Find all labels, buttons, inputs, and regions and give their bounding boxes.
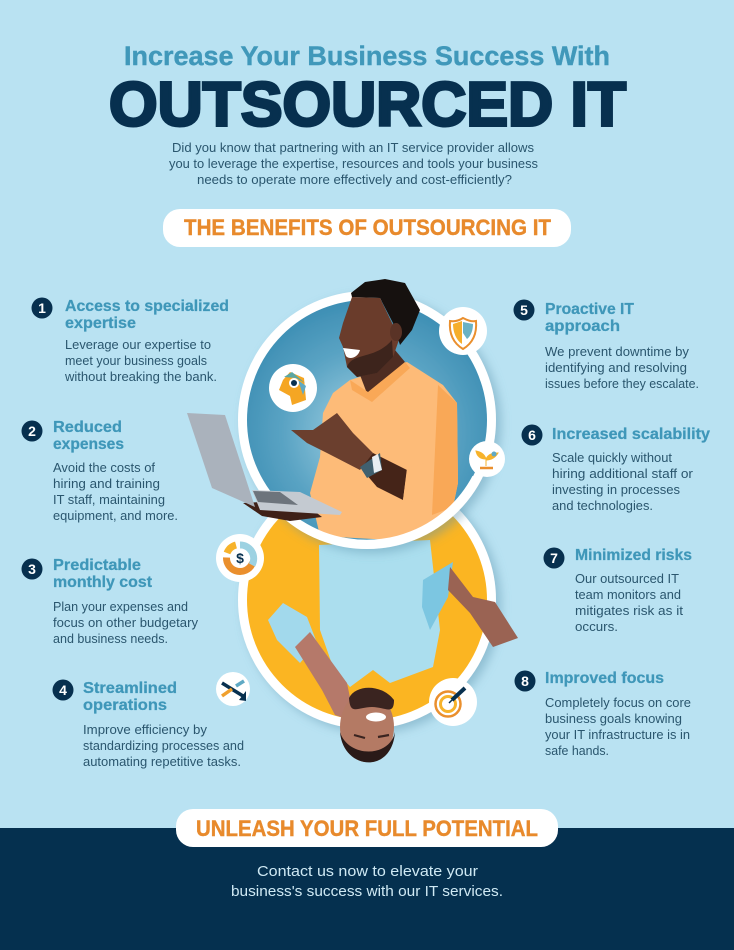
benefit 7: minimized risks: Our outsourced IT (575, 571, 679, 586)
benefit 4: streamlined operations (52, 680, 244, 769)
icon: dollar chart: $ (236, 550, 244, 566)
icon: dollar chart (216, 534, 264, 582)
upper circle (242, 296, 492, 544)
benefit 2: reduced expenses: Avoid the costs of (53, 460, 155, 475)
benefit 6: increased scalability: and technologies. (552, 498, 653, 513)
benefit 6: increased scalability: Scale quickly without (552, 450, 672, 465)
benefit 7: minimized risks: occurs. (575, 619, 618, 634)
reflected man (268, 540, 518, 762)
benefit 8: improved focus: 8 (521, 673, 529, 689)
benefit 5: proactive IT approach (514, 300, 699, 391)
benefit 5: proactive IT approach: We prevent downtime by (545, 344, 690, 359)
benefit 1: access to specialized expertise: Access to specialized (65, 298, 229, 315)
benefit 2: reduced expenses (22, 419, 178, 523)
benefit 5: proactive IT approach: Proactive IT (545, 301, 635, 318)
title: outsourced IT: OUTSOURCED IT (109, 70, 626, 140)
benefit 6: increased scalability (522, 424, 710, 513)
benefit 2: reduced expenses: expenses (53, 436, 124, 453)
benefit 3: predictable monthly cost: 3 (28, 561, 36, 577)
benefit 1: access to specialized expertise: 1 (38, 300, 46, 316)
benefit 6: increased scalability: hiring additional staff or (552, 466, 694, 481)
benefit 6: increased scalability: investing in processes (552, 482, 680, 497)
benefit 2: reduced expenses: IT staff, maintaining (53, 492, 165, 507)
icon: crossing arrows (216, 672, 250, 706)
benefit 2: reduced expenses: equipment, and more. (53, 508, 178, 523)
footer call to action: Contact us now to elevate your (257, 863, 478, 880)
icon: target (429, 678, 477, 726)
upper ring passing in front of shirt (300, 478, 476, 544)
benefit 2: reduced expenses: Reduced (53, 419, 122, 436)
footer call to action (231, 863, 503, 900)
benefit 4: streamlined operations: automating repetitive tasks. (83, 754, 241, 769)
benefit 2: reduced expenses: 2 (28, 423, 36, 439)
intro paragraph: needs to operate more effectively and cost-efficiently? (197, 172, 512, 187)
benefit 7: minimized risks: Minimized risks (575, 547, 692, 564)
lower circle (242, 476, 492, 724)
benefit 3: predictable monthly cost: focus on other budgetary (53, 615, 199, 630)
benefit 7: minimized risks: team monitors and (575, 587, 681, 602)
heading pill: the benefits of outsourcing IT: THE BENEFITS OF OUTSOURCING IT (184, 215, 552, 240)
benefit 4: streamlined operations: 4 (59, 682, 67, 698)
benefit 8: improved focus: your IT infrastructure is in (545, 727, 690, 742)
benefit 8: improved focus: business goals knowing (545, 711, 682, 726)
footer call to action: business's success with our IT services. (231, 883, 503, 900)
benefit 5: proactive IT approach: issues before they escalate. (545, 376, 699, 391)
benefit 7: minimized risks: mitigates risk as it (575, 603, 683, 618)
benefit 3: predictable monthly cost: monthly cost (53, 574, 152, 591)
benefit 4: streamlined operations: operations (83, 697, 167, 714)
benefit 4: streamlined operations: Improve efficiency by (83, 722, 208, 737)
benefit 1: access to specialized expertise: without breaking the bank. (64, 369, 217, 384)
intro paragraph (169, 140, 538, 187)
benefit 5: proactive IT approach: approach (545, 318, 620, 335)
benefit 4: streamlined operations: Streamlined (83, 680, 177, 697)
benefit 5: proactive IT approach: 5 (520, 302, 528, 318)
icon: sprout (469, 441, 505, 477)
laptop (187, 413, 342, 521)
footer pill: unleash your full potential (176, 809, 558, 847)
footer pill: unleash your full potential: UNLEASH YOUR FULL POTENTIAL (196, 816, 538, 841)
heading pill: the benefits of outsourcing IT (163, 209, 571, 247)
benefit 6: increased scalability: 6 (528, 427, 536, 443)
man with laptop (291, 279, 458, 541)
benefit 1: access to specialized expertise: Leverage our expertise to (65, 337, 211, 352)
benefit 7: minimized risks: 7 (550, 550, 558, 566)
benefit 1: access to specialized expertise (32, 298, 229, 384)
benefit 1: access to specialized expertise: expertise (65, 315, 136, 332)
benefit 8: improved focus (514, 670, 691, 758)
benefit 8: improved focus: safe hands. (545, 743, 609, 758)
benefit 5: proactive IT approach: identifying and resolving (545, 360, 687, 375)
benefit 1: access to specialized expertise: meet your business goals (65, 353, 207, 368)
central illustration: two circles with man and reflected man (187, 279, 518, 762)
icon: shield (439, 307, 487, 355)
benefit 3: predictable monthly cost: and business needs. (53, 631, 168, 646)
intro paragraph: you to leverage the expertise, resources and tools your business (169, 156, 538, 171)
footer band (0, 809, 734, 950)
icon: head with eye (269, 364, 317, 412)
benefit 7: minimized risks (544, 547, 692, 634)
title: increase your business success with: Increase Your Business Success With (124, 41, 610, 71)
benefit 3: predictable monthly cost: Plan your expenses and (53, 599, 188, 614)
benefit 3: predictable monthly cost (22, 557, 199, 646)
intro paragraph: Did you know that partnering with an IT service provider allows (172, 140, 534, 155)
benefit 8: improved focus: Completely focus on core (545, 695, 691, 710)
benefit 2: reduced expenses: hiring and training (53, 476, 160, 491)
benefit 8: improved focus: Improved focus (545, 670, 664, 687)
benefit 6: increased scalability: Increased scalability (552, 426, 710, 443)
benefit 3: predictable monthly cost: Predictable (53, 557, 141, 574)
benefit 4: streamlined operations: standardizing processes and (83, 738, 244, 753)
